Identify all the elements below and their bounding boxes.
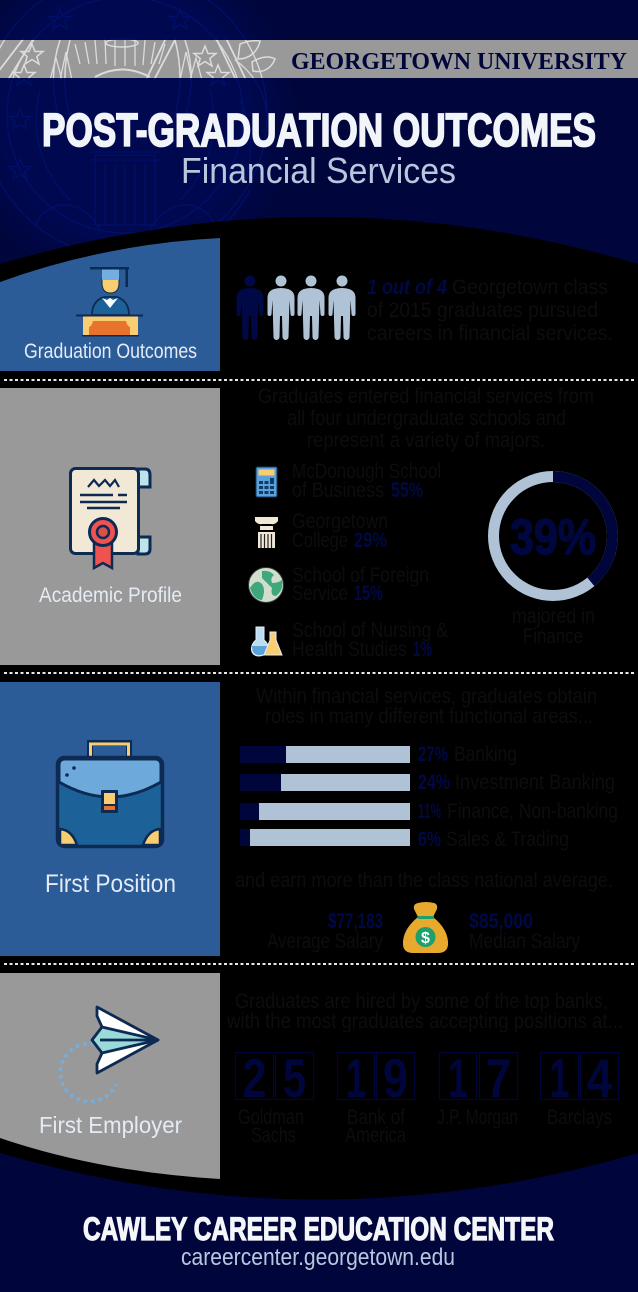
average salary: Average Salary: [267, 930, 383, 953]
bar chart: functional areas: Banking: [454, 743, 517, 766]
bar chart: functional areas: 27%: [418, 743, 448, 766]
bar chart: functional areas: 24%: [418, 771, 450, 794]
school: Georgetown College: [292, 510, 388, 552]
icon: calculator: [256, 467, 277, 497]
employer: J.P. Morgan: 1: [448, 1047, 468, 1109]
median salary: $85,000: [469, 910, 533, 933]
text: one out of four: careers in financial services.: [367, 322, 613, 345]
bar chart: functional areas: 6%: [418, 828, 441, 851]
intro: first employer: [226, 990, 623, 1033]
panel: academic profile: [0, 388, 220, 665]
bar chart: functional areas: Sales & Trading: [446, 828, 569, 851]
median salary: Median Salary: [469, 930, 580, 953]
intro: academic: [258, 385, 594, 452]
employer: Goldman Sachs: 2: [242, 1047, 266, 1109]
icon: column: [255, 517, 278, 548]
school: McDonough: of Business: [292, 479, 384, 502]
icon: diploma: [70, 468, 150, 568]
employer: Barclays: [540, 1047, 618, 1129]
subtitle: Financial Services: [181, 150, 456, 191]
employer: Goldman Sachs: Sachs: [251, 1124, 296, 1147]
intro: first position: Within financial services, graduates obtain: [256, 685, 597, 708]
intro: academic: all four undergraduate schools and: [287, 407, 566, 430]
school: Foreign Service: School of Foreign: [292, 564, 429, 587]
text: one out of four: [367, 276, 613, 345]
employer: J.P. Morgan: 7: [486, 1047, 511, 1109]
bar chart: functional areas: 11%: [418, 800, 441, 823]
school: Georgetown College: College: [292, 529, 348, 552]
bar chart: functional areas: [240, 743, 618, 851]
panel: first position: First Position: [45, 870, 176, 898]
school: Georgetown College: Georgetown: [292, 510, 388, 533]
median salary: [469, 910, 580, 953]
school: Nursing: Health Studies: [292, 638, 407, 661]
icon: money bag: [403, 902, 448, 953]
text: one out of four: 1 out of 4: [367, 276, 447, 299]
employer: Bank of America: 1: [346, 1047, 366, 1109]
intro: first position: roles in many different functional areas...: [265, 705, 593, 728]
people pictogram: one of four: [236, 276, 356, 340]
header band: GEORGETOWN UNIVERSITY: [291, 49, 627, 75]
panel: first position: [0, 682, 220, 956]
panel: first employer: First Employer: [39, 1112, 182, 1138]
employer: Goldman Sachs: Goldman: [238, 1106, 304, 1129]
employer: J.P. Morgan: [437, 1047, 518, 1129]
icon: flasks: [251, 627, 282, 656]
school: McDonough: [292, 460, 441, 502]
school: Nursing: 1%: [413, 638, 432, 661]
school: Foreign Service: 15%: [354, 582, 383, 605]
employer: Barclays: 1: [550, 1047, 570, 1109]
icon: paper plane: [60, 1007, 158, 1102]
donut caption: [512, 605, 595, 648]
school: Georgetown College: 29%: [354, 529, 387, 552]
average salary: $77,183: [328, 910, 383, 933]
panel: graduation outcomes: [0, 238, 220, 371]
intro: academic: represent a variety of majors.: [307, 429, 545, 452]
employer: J.P. Morgan: J.P. Morgan: [437, 1106, 518, 1129]
panel: academic profile: Academic Profile: [39, 584, 182, 607]
employer: Barclays: 4: [586, 1047, 613, 1109]
footer url: careercenter.georgetown.edu: [181, 1244, 455, 1271]
employer: Barclays: Barclays: [547, 1106, 612, 1129]
employer: Bank of America: [338, 1047, 414, 1147]
icon: globe: [248, 568, 284, 602]
donut chart: 39%: [494, 476, 612, 596]
school: Foreign Service: [292, 564, 429, 605]
seal watermark: [0, 0, 300, 290]
icon: briefcase: [58, 743, 162, 846]
header band: [0, 40, 638, 78]
text: one out of four: Georgetown class: [452, 276, 608, 299]
school: Nursing: [292, 619, 448, 661]
panel: first employer: [0, 973, 220, 1179]
donut caption: Finance: [523, 625, 583, 648]
average salary: [267, 910, 383, 953]
employer: Goldman Sachs: 5: [283, 1047, 306, 1109]
employer: Bank of America: America: [345, 1124, 406, 1147]
panel: graduation outcomes: Graduation Outcomes: [24, 340, 197, 363]
black content area: [0, 217, 638, 1200]
school: McDonough: McDonough School: [292, 460, 441, 483]
bar chart: functional areas: Investment Banking: [455, 771, 615, 794]
intro: first position: [256, 685, 597, 728]
donut caption: majored in: [512, 605, 595, 628]
donut chart: 39%: 39%: [510, 509, 596, 565]
intro: academic: Graduates entered financial services from: [258, 385, 594, 408]
text: one out of four: of 2015 graduates pursued: [367, 299, 598, 322]
employer: Bank of America: Bank of: [347, 1106, 405, 1129]
school: Nursing: School of Nursing &: [292, 619, 448, 642]
icon: money bag: $: [421, 930, 430, 947]
school: McDonough: 55%: [391, 479, 423, 502]
employer: Bank of America: 9: [383, 1047, 408, 1109]
employer: Goldman Sachs: [236, 1047, 314, 1147]
school: Foreign Service: Service: [292, 582, 348, 605]
icon: graduate: [76, 267, 143, 336]
